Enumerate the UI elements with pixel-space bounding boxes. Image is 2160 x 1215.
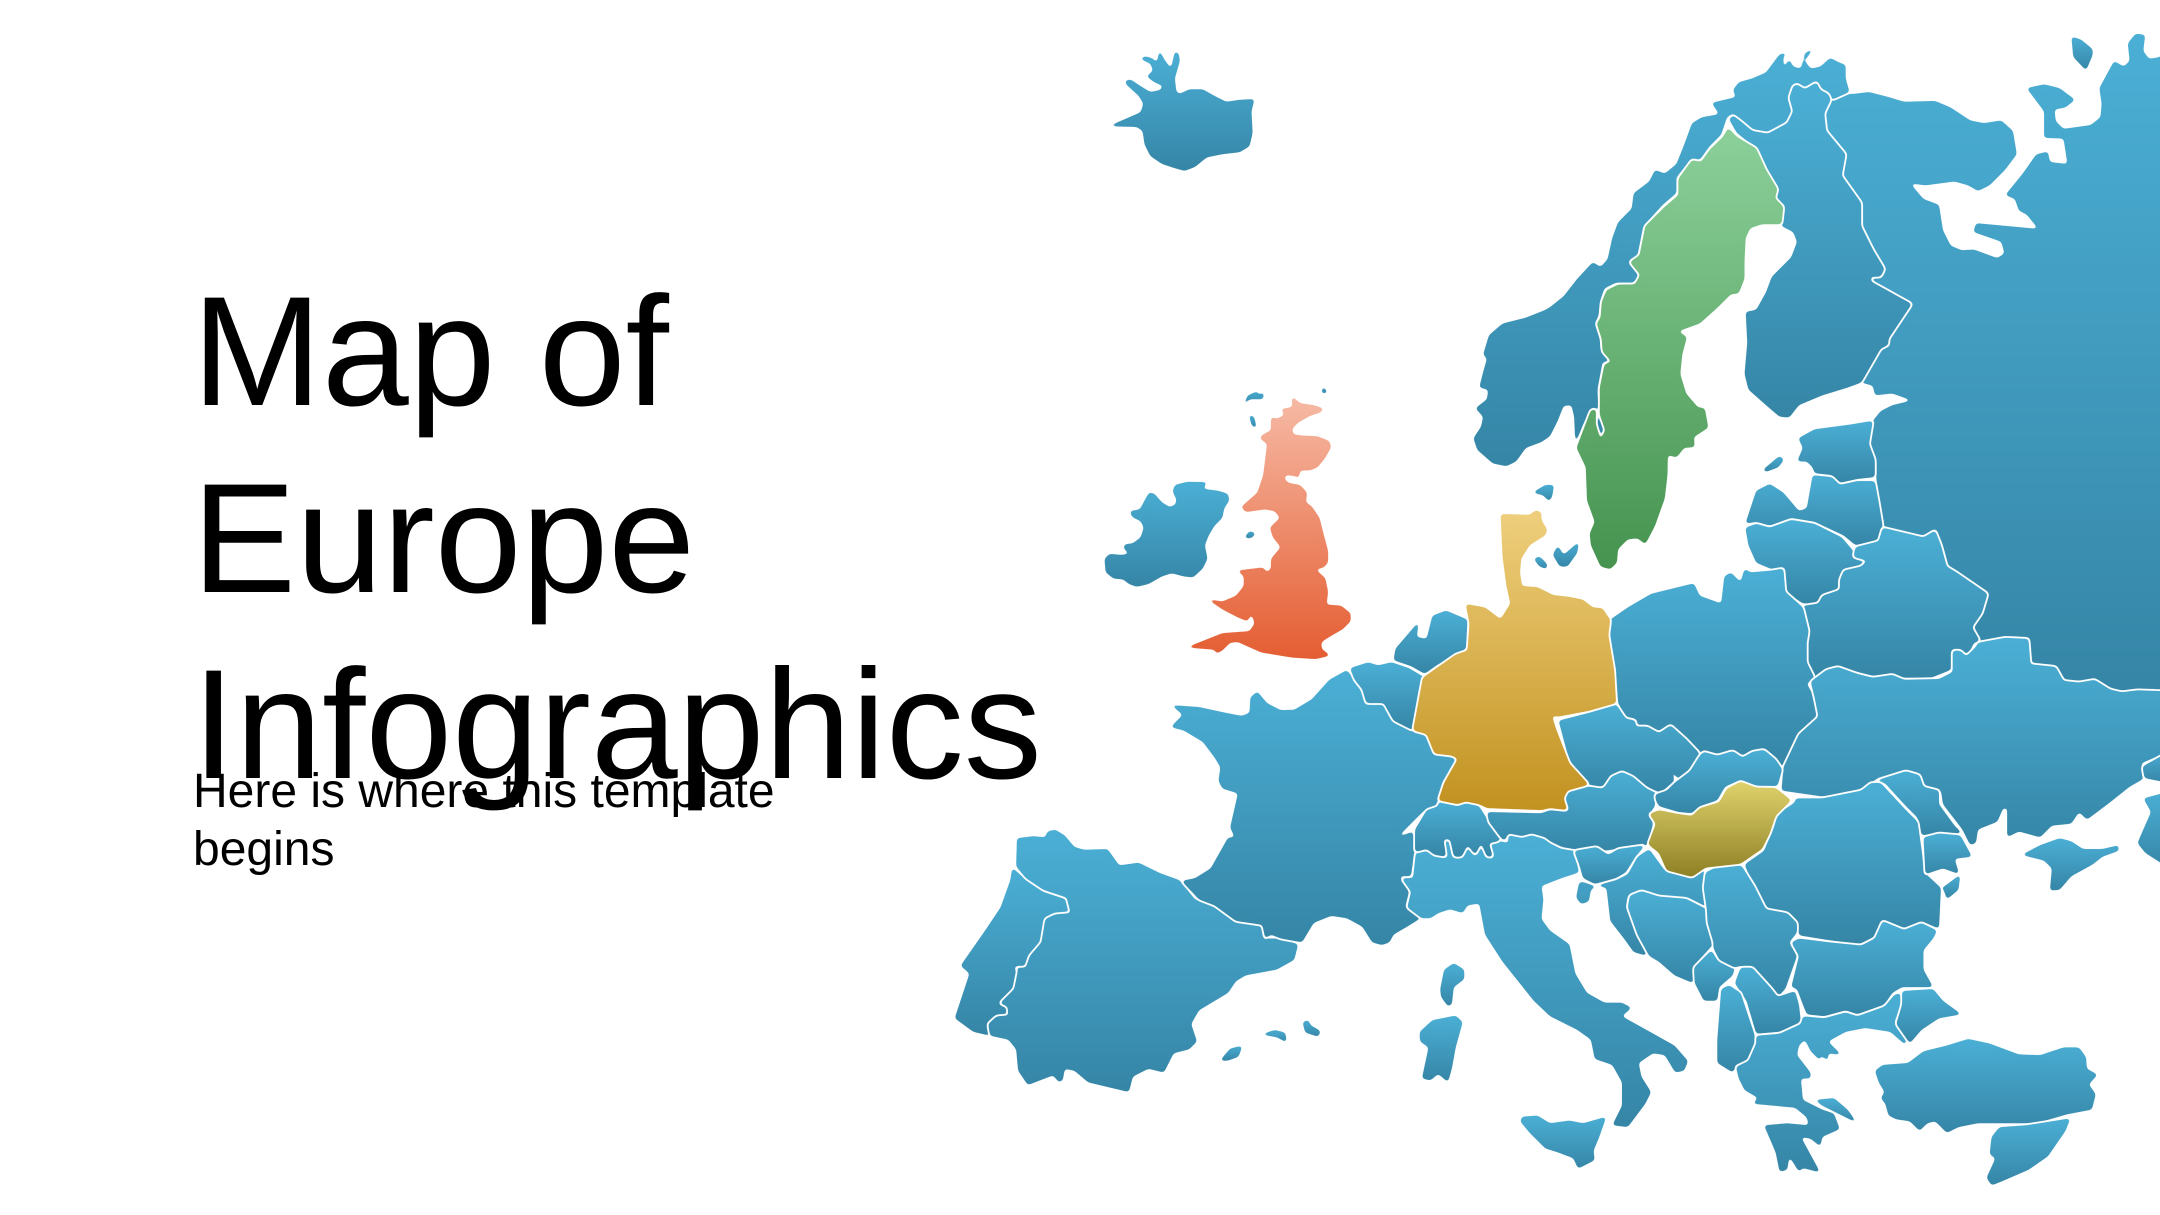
Romania [1745, 783, 1941, 944]
Netherlands [1393, 611, 1467, 674]
Balearic island: Mallorca [1220, 1045, 1243, 1061]
Slovakia [1655, 750, 1782, 813]
western Europe [955, 396, 1467, 1092]
Balearic island: Menorca [1260, 1030, 1287, 1043]
Germany and Denmark [1413, 510, 1616, 810]
Greece [1736, 993, 1906, 1173]
Iceland [1108, 50, 1255, 171]
Saaremaa island [1762, 456, 1784, 472]
Black Sea coast spit [1941, 874, 1960, 900]
north-west islands [1104, 50, 1554, 587]
Funen island [1534, 556, 1547, 569]
Hungary [1648, 782, 1791, 877]
Norway [1473, 47, 1850, 466]
Austria [1487, 770, 1655, 851]
United Kingdom [1186, 396, 1351, 659]
subtitle: Here is where this template [193, 765, 775, 818]
Danube delta [1923, 833, 1972, 874]
Sweden [1576, 128, 1783, 569]
Spain [988, 830, 1298, 1092]
Italy [1401, 833, 1688, 1127]
Slovenia [1574, 845, 1645, 884]
Euboea island [1815, 1098, 1857, 1123]
title: Infographics [192, 638, 1042, 812]
European Turkey [1896, 989, 1962, 1043]
title: Europe [192, 452, 695, 626]
Novaya Zemlya island [2071, 36, 2093, 71]
Switzerland [1415, 802, 1501, 857]
Poland [1608, 568, 1818, 767]
Bulgaria [1791, 921, 1937, 1016]
Finland [1729, 82, 1912, 418]
Belgium [1350, 662, 1424, 730]
Corsica [1440, 963, 1464, 1007]
Croatia [1576, 849, 1708, 956]
Rostov region of Russia [2142, 750, 2160, 784]
Bosnia and Herzegovina [1628, 891, 1713, 983]
Hebrides [1243, 390, 1264, 406]
Crimea [2022, 838, 2119, 891]
central and south-eastern Europe [1401, 510, 2160, 1185]
North Macedonia [1735, 968, 1801, 1034]
Belarus [1803, 528, 1988, 678]
Zealand island [1532, 485, 1554, 502]
subtitle [193, 765, 775, 876]
France [1171, 670, 1456, 945]
Balearic island: Ibiza [1302, 1020, 1321, 1037]
Sardinia [1420, 1015, 1463, 1082]
Shetland [1321, 386, 1328, 393]
subtitle: begins [193, 823, 334, 876]
Albania [1717, 985, 1755, 1073]
Outer island [1249, 414, 1257, 429]
title [192, 265, 1042, 812]
Russia [1824, 34, 2160, 692]
Lithuania [1745, 520, 1867, 604]
Czech Republic [1559, 704, 1700, 793]
title: Map of [192, 265, 669, 439]
Estonia [1797, 421, 1875, 483]
Ukraine [1781, 638, 2160, 845]
Montenegro [1694, 950, 1735, 1001]
Sicily [1520, 1115, 1606, 1169]
Serbia [1704, 865, 1797, 997]
Caucasus region of Russia [2137, 791, 2160, 870]
Gotland and Danish islands [1553, 541, 1579, 567]
Latvia [1745, 475, 1883, 545]
Portugal [955, 868, 1070, 1036]
northern Europe [1473, 34, 2160, 692]
Anatolia [1875, 1039, 2098, 1133]
Ireland [1104, 482, 1229, 587]
Isle of Man [1244, 531, 1256, 538]
south-eastern Turkey [1986, 1118, 2071, 1185]
Moldova [1875, 771, 1962, 835]
